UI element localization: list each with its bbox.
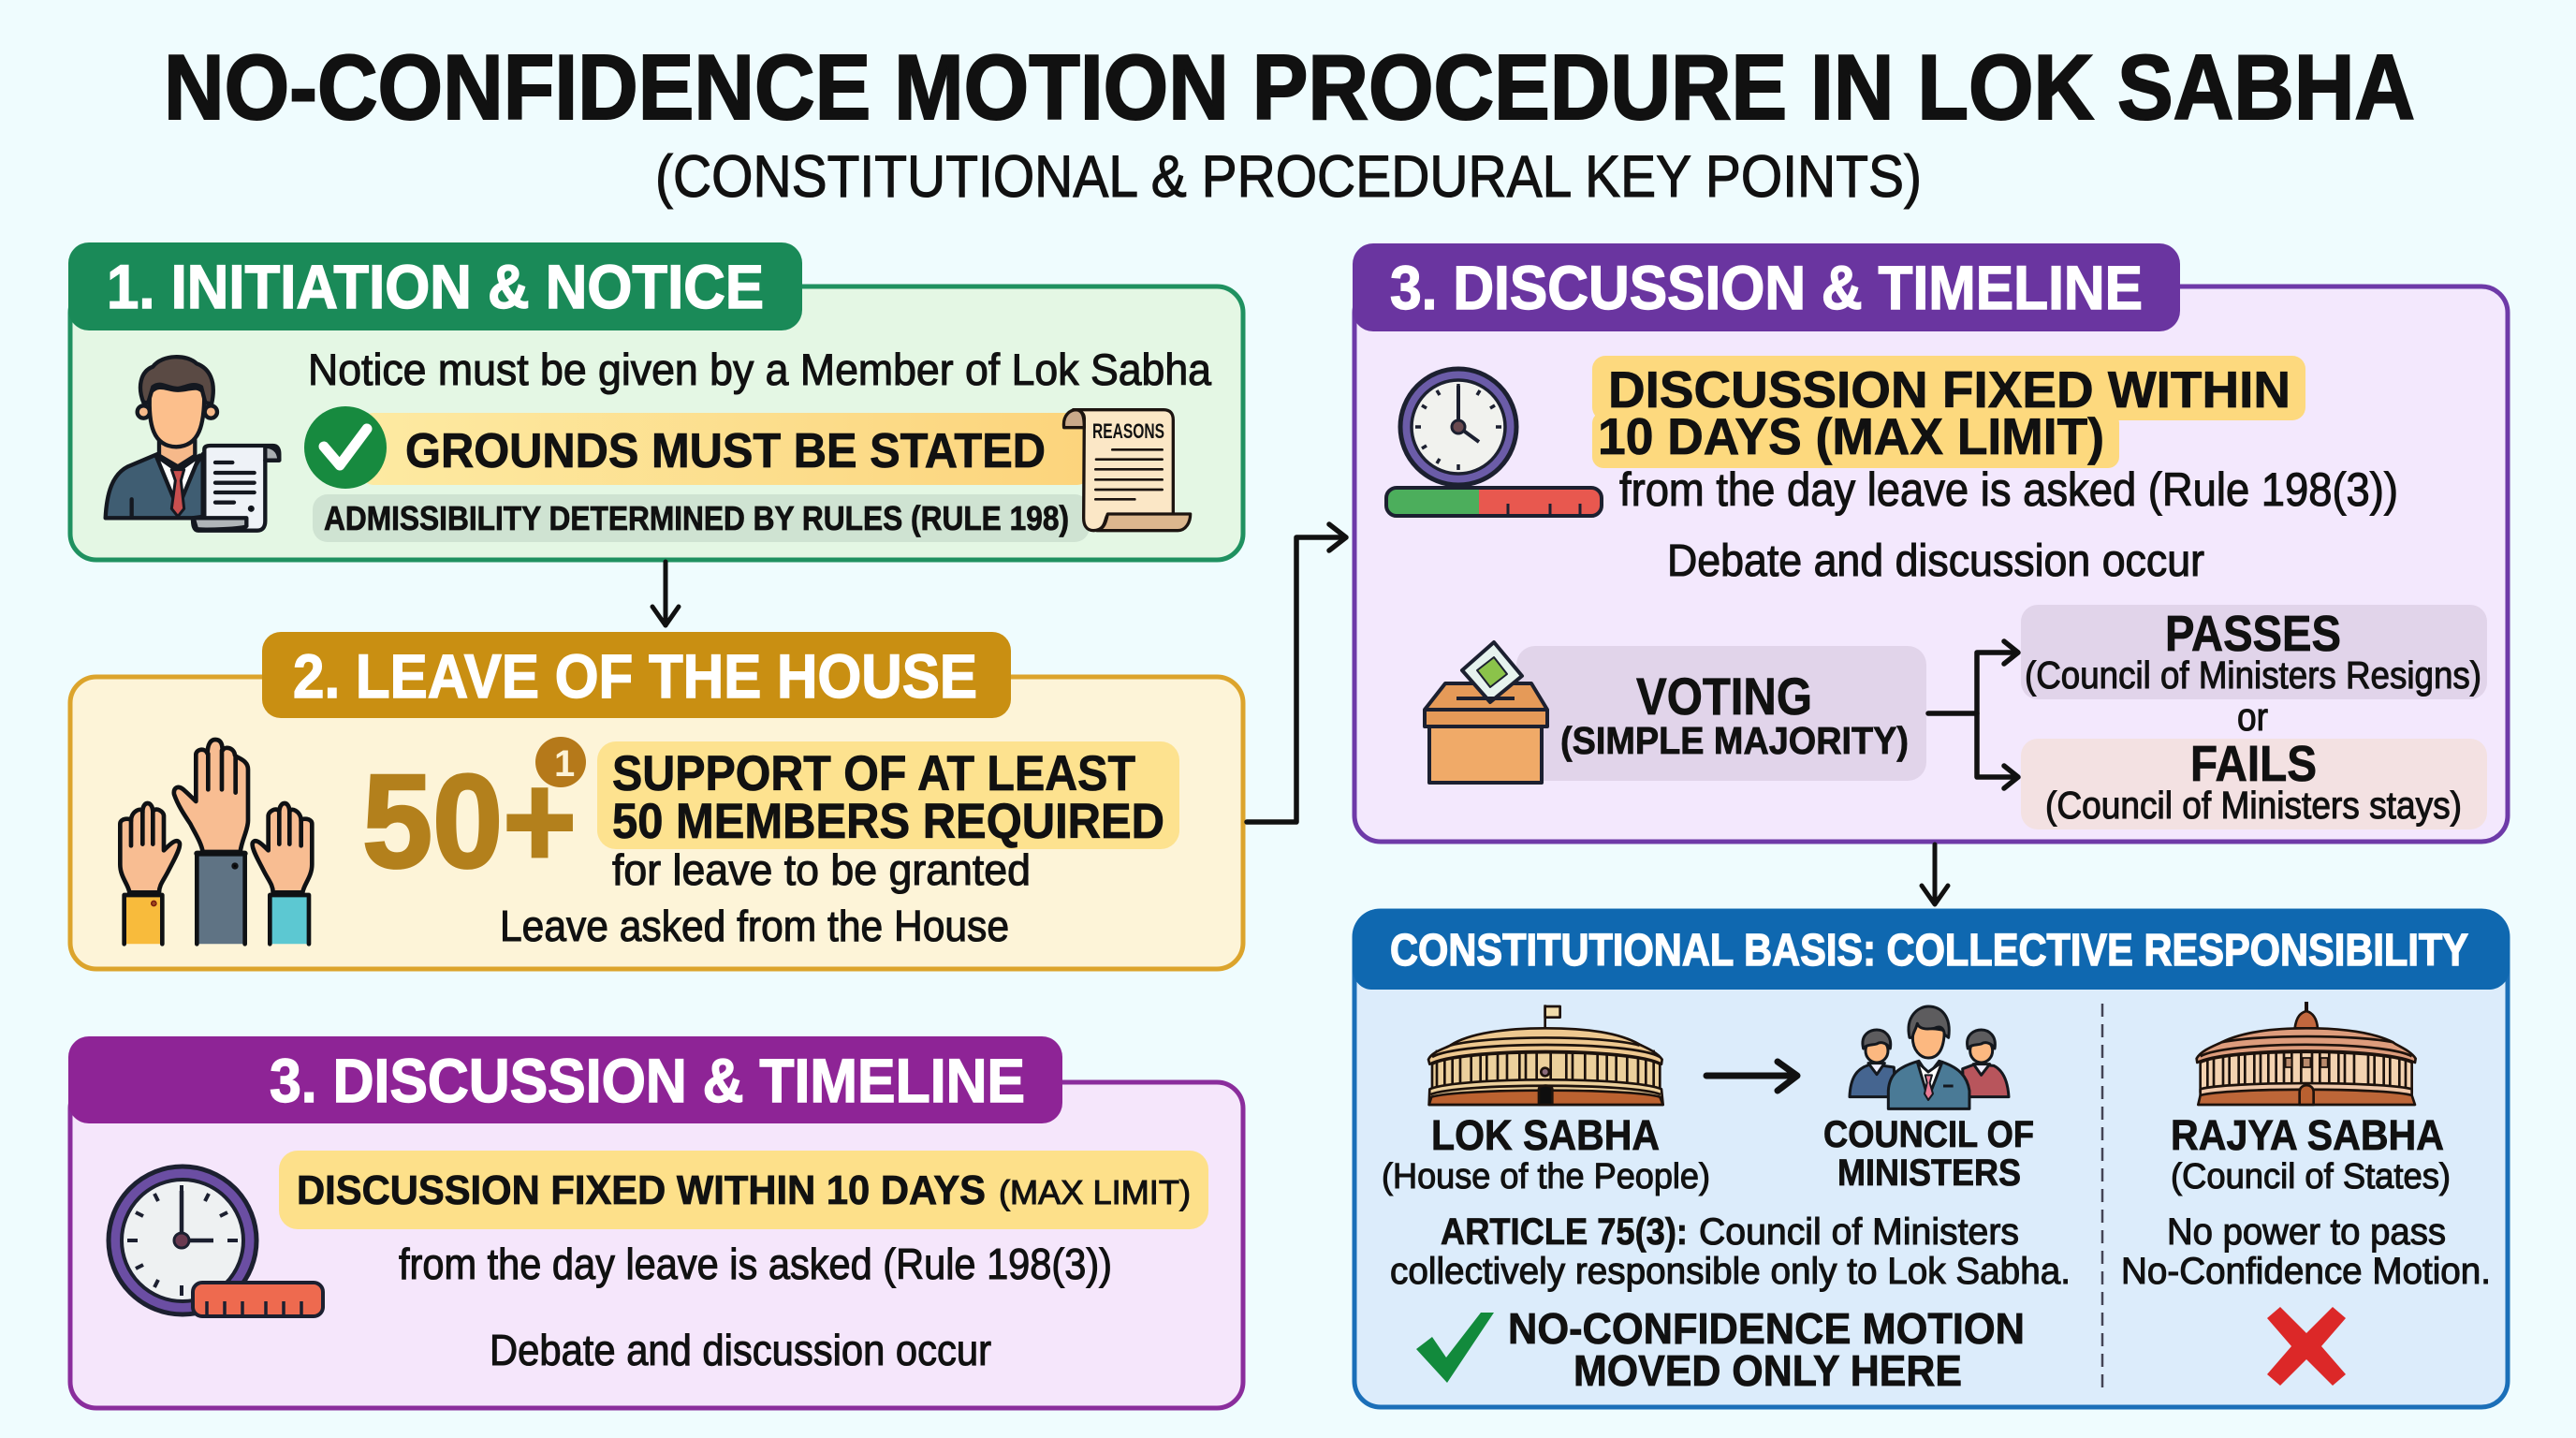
icon: clock on progress bar xyxy=(1386,369,1602,516)
highlight: support requirement xyxy=(597,741,1179,849)
badge: number 1 xyxy=(535,737,586,787)
text: no power xyxy=(2121,1211,2491,1292)
highlight: grounds must be stated: GROUNDS MUST BE STATED xyxy=(405,424,1046,478)
icon: member holding notice xyxy=(106,357,279,531)
outcome: fails: (Council of Ministers stays) xyxy=(2045,784,2462,827)
title: NO-CONFIDENCE MOTION PROCEDURE IN LOK SABHA xyxy=(164,36,2415,139)
heading band: constitutional basis xyxy=(1353,909,2510,990)
icon: ballot box xyxy=(1425,642,1547,783)
panel: constitutional basis xyxy=(1353,909,2510,1407)
text: debate occurs: Debate and discussion occur xyxy=(490,1326,991,1374)
voting box: (SIMPLE MAJORITY) xyxy=(1560,719,1909,762)
heading tab: discussion (right): 3. DISCUSSION & TIMELINE xyxy=(1390,253,2143,322)
text: house of the people: (House of the People) xyxy=(1382,1157,1710,1196)
text: from the day leave is asked: from the day leave is asked (Rule 198(3)) xyxy=(1619,463,2398,516)
arrow: leave to discussion xyxy=(1247,524,1346,822)
article 75(3) statement: Council of Ministers xyxy=(1699,1211,2019,1253)
label: rajya sabha name: RAJYA SABHA xyxy=(2171,1111,2444,1159)
text: leave asked: Leave asked from the House xyxy=(500,902,1009,950)
outcome: passes: (Council of Ministers Resigns) xyxy=(2025,653,2481,697)
label: council of ministers: MINISTERS xyxy=(1837,1152,2021,1194)
highlight: discussion fixed within 10 days: DISCUSSION FIXED WITHIN xyxy=(1608,360,2291,418)
panel: 1. initiation and notice xyxy=(68,242,1243,560)
highlight: support requirement: 50 MEMBERS REQUIRED xyxy=(612,794,1164,849)
notice requirement text: Notice must be given by a Member of Lok Sabha xyxy=(308,345,1212,394)
panel: 3. discussion and timeline (left) xyxy=(68,1036,1243,1408)
text: motion moved only here: NO-CONFIDENCE MOTION xyxy=(1508,1304,2025,1353)
icon: lok sabha building xyxy=(1428,1005,1663,1105)
highlight: grounds must be stated xyxy=(304,406,1090,489)
voting box xyxy=(1516,646,1926,781)
icon: red cross xyxy=(2267,1307,2346,1386)
outcome: passes xyxy=(2021,605,2487,699)
outcome: fails: FAILS xyxy=(2190,736,2317,792)
highlight: discussion fixed within 10 days xyxy=(1592,356,2305,468)
article 75(3) statement: ARTICLE 75(3): xyxy=(1441,1211,1688,1253)
icon: green check xyxy=(1416,1313,1494,1383)
outcome: passes: PASSES xyxy=(2165,606,2341,662)
icon: reasons scroll: REASONS xyxy=(1092,419,1164,443)
text: or: or xyxy=(2237,695,2268,739)
heading tab: initiation and notice: 1. INITIATION & NOTICE xyxy=(107,252,764,321)
icon: check badge xyxy=(304,406,387,489)
text: council of states: (Council of States) xyxy=(2171,1157,2451,1196)
heading tab: leave of the house: 2. LEAVE OF THE HOUSE xyxy=(293,641,977,711)
highlight: support requirement: SUPPORT OF AT LEAST xyxy=(612,746,1135,801)
article 75(3) statement xyxy=(1390,1211,2071,1292)
icon: raised hands xyxy=(120,740,312,944)
badge: number 1: 1 xyxy=(554,743,575,785)
heading tab: discussion (left): 3. DISCUSSION & TIMELINE xyxy=(270,1046,1025,1115)
label: lok sabha name: LOK SABHA xyxy=(1431,1111,1660,1159)
label: council of ministers xyxy=(1823,1114,2034,1194)
arrow: discussion to constitutional basis xyxy=(1922,844,1948,904)
text: no power: No-Confidence Motion. xyxy=(2121,1251,2491,1292)
heading tab: discussion (left) xyxy=(68,1036,1062,1123)
stat: 50 plus: 50+ xyxy=(362,747,577,896)
icon: rajya sabha building xyxy=(2197,1002,2416,1105)
highlight: discussion fixed: (MAX LIMIT) xyxy=(999,1173,1191,1211)
voting box: VOTING xyxy=(1636,667,1812,726)
highlight: discussion fixed xyxy=(279,1151,1208,1229)
arrow: lok sabha to council xyxy=(1706,1062,1797,1091)
panel: 2. leave of the house xyxy=(70,632,1243,969)
text: motion moved only here: MOVED ONLY HERE xyxy=(1573,1346,1962,1395)
article 75(3) statement: collectively responsible only to Lok Sabha. xyxy=(1390,1251,2071,1292)
text: motion moved only here xyxy=(1508,1304,2025,1395)
label: council of ministers: COUNCIL OF xyxy=(1823,1114,2034,1155)
subtitle: (CONSTITUTIONAL & PROCEDURAL KEY POINTS) xyxy=(655,144,1922,210)
icon: reasons scroll xyxy=(1063,410,1191,531)
icon: clock with ruler xyxy=(109,1167,323,1316)
highlight: discussion fixed: DISCUSSION FIXED WITHIN 10 DAYS xyxy=(297,1167,986,1213)
outcome: fails xyxy=(2021,736,2487,829)
arrow: initiation to leave xyxy=(652,562,679,625)
text: for leave to be granted: for leave to be granted xyxy=(612,845,1031,894)
text: no power: No power to pass xyxy=(2167,1211,2446,1253)
text: from the day leave is asked: from the day leave is asked (Rule 198(3)) xyxy=(399,1240,1112,1288)
highlight: discussion fixed within 10 days: 10 DAYS (MAX LIMIT) xyxy=(1598,407,2104,465)
admissibility note: ADMISSIBILITY DETERMINED BY RULES (RULE 198) xyxy=(324,499,1069,537)
text: debate occurs: Debate and discussion occur xyxy=(1667,536,2204,586)
arrow: voting outcome branch xyxy=(1928,641,2018,788)
icon: council of ministers xyxy=(1850,1006,2009,1108)
panel: 3. discussion and timeline (right) xyxy=(1353,243,2508,842)
